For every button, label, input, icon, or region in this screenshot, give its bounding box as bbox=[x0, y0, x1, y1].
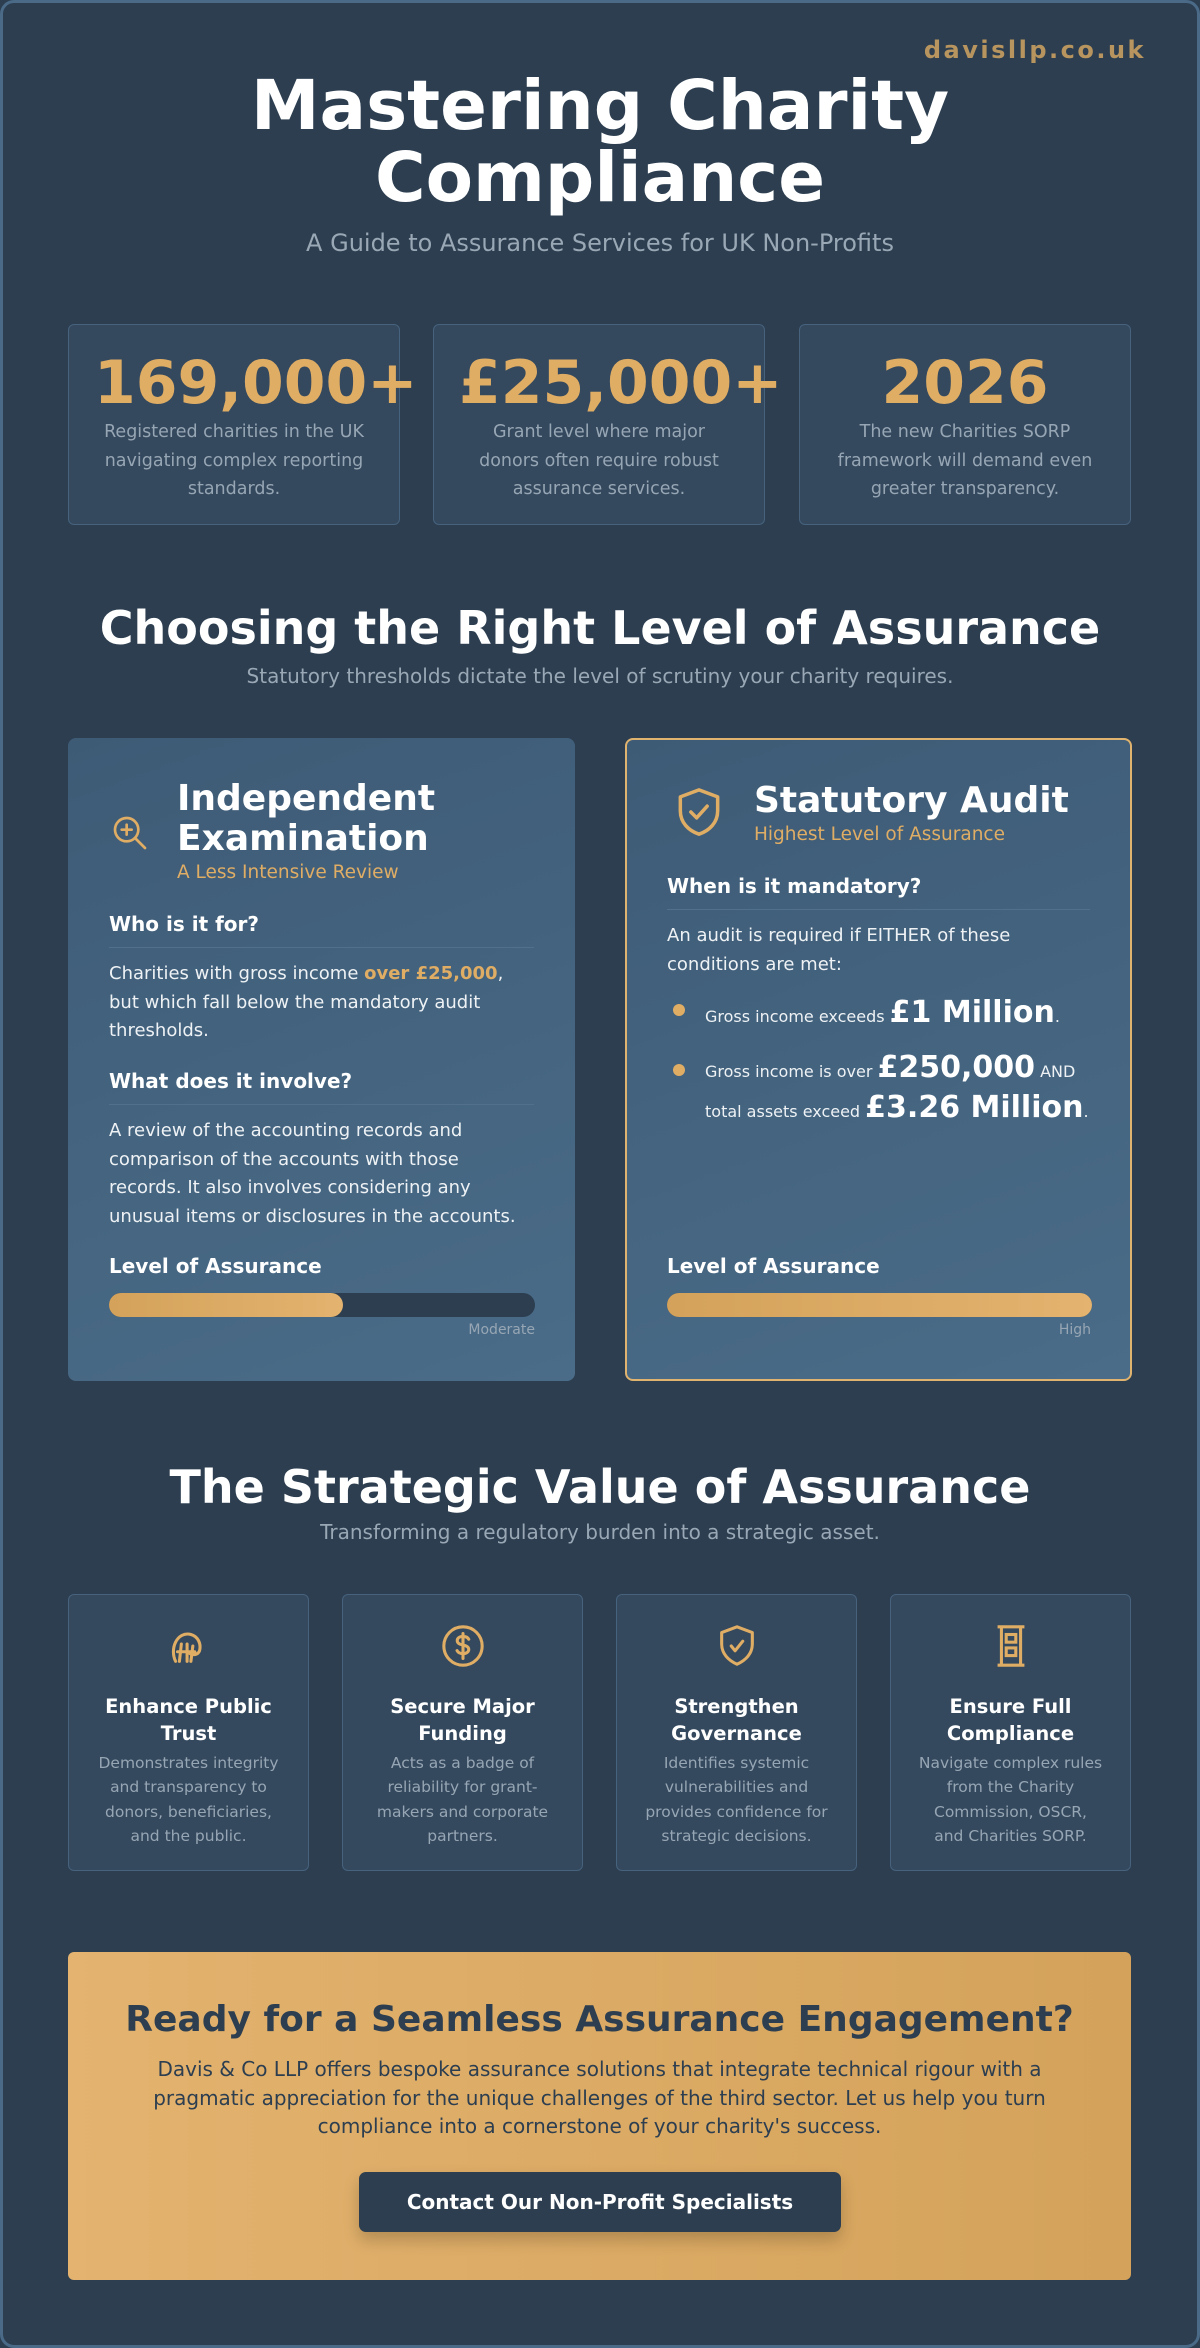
stat: grant level bbox=[433, 324, 765, 525]
benefit: compliance: Navigate complex rules from the Charity Commission, OSCR, and Charities SORP. bbox=[919, 1754, 1102, 1845]
card title: Examination bbox=[177, 818, 429, 859]
benefit: governance bbox=[616, 1594, 857, 1871]
stat: grant level: Grant level where major donors often require robust assurance services. bbox=[479, 422, 719, 499]
what does it involve: What does it involve? bbox=[109, 1069, 352, 1093]
stat: charities bbox=[68, 324, 400, 525]
panel: statutory audit bbox=[625, 738, 1132, 1381]
cta text: Davis & Co LLP offers bespoke assurance solutions that integrate technical rigour with a pragmatic appreciation for the unique challenges of the third sector. Let us help you turn compliance into a cornerstone of your charity's success. bbox=[153, 2057, 1046, 2138]
title: Compliance bbox=[375, 138, 825, 218]
who is it for bbox=[109, 912, 534, 1041]
card title: Independent bbox=[177, 778, 435, 819]
card title: Statutory Audit bbox=[754, 780, 1069, 821]
stat: SORP: 2026 bbox=[882, 348, 1048, 418]
icon: shield check bbox=[720, 1625, 754, 1666]
level of assurance label: Level of Assurance bbox=[667, 1254, 880, 1278]
benefit: governance: Strengthen Governance bbox=[671, 1695, 802, 1745]
who is it for: Who is it for? bbox=[109, 912, 259, 936]
section subtitle: Statutory thresholds dictate the level of scrutiny your charity requires. bbox=[247, 664, 953, 688]
when mandatory: When is it mandatory? bbox=[667, 874, 921, 898]
cta heading: Ready for a Seamless Assurance Engagement? bbox=[125, 1999, 1074, 2040]
icon: handshake bbox=[172, 1632, 202, 1663]
benefit: compliance: Ensure Full Compliance bbox=[947, 1695, 1074, 1745]
what does it involve: A review of the accounting records and comparison of the accounts with those records. It also involves considering any unusual items or disclosures in the accounts. bbox=[109, 1120, 516, 1226]
benefit: public trust: Demonstrates integrity and transparency to donors, beneficiaries, and the public. bbox=[98, 1754, 279, 1845]
stat: SORP: The new Charities SORP framework will demand even greater transparency. bbox=[838, 422, 1092, 499]
stat: SORP bbox=[799, 324, 1131, 525]
benefit: funding bbox=[342, 1594, 583, 1871]
when mandatory: An audit is required if EITHER of these conditions are met: bbox=[667, 925, 1010, 974]
icon: building bbox=[998, 1625, 1024, 1667]
call to action panel bbox=[68, 1952, 1131, 2280]
card subtitle: Highest Level of Assurance bbox=[754, 824, 1005, 845]
bar label: High bbox=[1059, 1322, 1091, 1338]
what does it involve bbox=[109, 1069, 534, 1226]
title: Mastering Charity bbox=[251, 66, 949, 146]
bar: high bbox=[667, 1293, 1092, 1317]
website label: davisllp.co.uk bbox=[924, 36, 1146, 64]
bar label: Moderate bbox=[468, 1322, 535, 1338]
stat: charities: Registered charities in the UK navigating complex reporting standards. bbox=[104, 422, 364, 499]
cta button bbox=[359, 2172, 841, 2232]
card subtitle: A Less Intensive Review bbox=[177, 862, 399, 883]
section subtitle: Transforming a regulatory burden into a strategic asset. bbox=[320, 1520, 880, 1544]
level of assurance label: Level of Assurance bbox=[109, 1254, 322, 1278]
subtitle: A Guide to Assurance Services for UK Non-Profits bbox=[306, 229, 894, 257]
benefit: governance: Identifies systemic vulnerabilities and provides confidence for strategic decisions. bbox=[645, 1754, 828, 1845]
bullet: income: Gross income exceeds £1 Million. bbox=[705, 995, 1060, 1030]
benefit: public trust bbox=[68, 1594, 309, 1871]
who is it for: Charities with gross income over £25,000, but which fall below the mandatory audit thresholds. bbox=[109, 963, 503, 1041]
icon: magnifier bbox=[114, 816, 146, 850]
section heading: strategic value: The Strategic Value of Assurance bbox=[170, 1460, 1030, 1514]
section heading: assurance levels: Choosing the Right Level of Assurance bbox=[100, 601, 1100, 655]
when mandatory bbox=[667, 874, 1090, 974]
icon: shield bbox=[678, 788, 720, 836]
bar: moderate bbox=[109, 1293, 535, 1317]
stat: charities: 169,000+ bbox=[94, 348, 418, 418]
benefit: compliance bbox=[890, 1594, 1131, 1871]
icon: dollar coin bbox=[442, 1625, 484, 1667]
benefit: funding: Secure Major Funding bbox=[390, 1695, 535, 1745]
benefit: funding: Acts as a badge of reliability for grant-makers and corporate partners. bbox=[377, 1754, 548, 1845]
title bbox=[251, 66, 949, 218]
bullet: income and assets: Gross income is over £250,000 AND total assets exceed £3.26 Million. bbox=[705, 1050, 1089, 1125]
card title bbox=[177, 778, 435, 859]
cta button: Contact Our Non-Profit Specialists bbox=[407, 2190, 793, 2214]
stat: grant level: £25,000+ bbox=[459, 348, 783, 418]
panel: independent examination bbox=[68, 738, 575, 1381]
benefit: public trust: Enhance Public Trust bbox=[105, 1695, 272, 1745]
